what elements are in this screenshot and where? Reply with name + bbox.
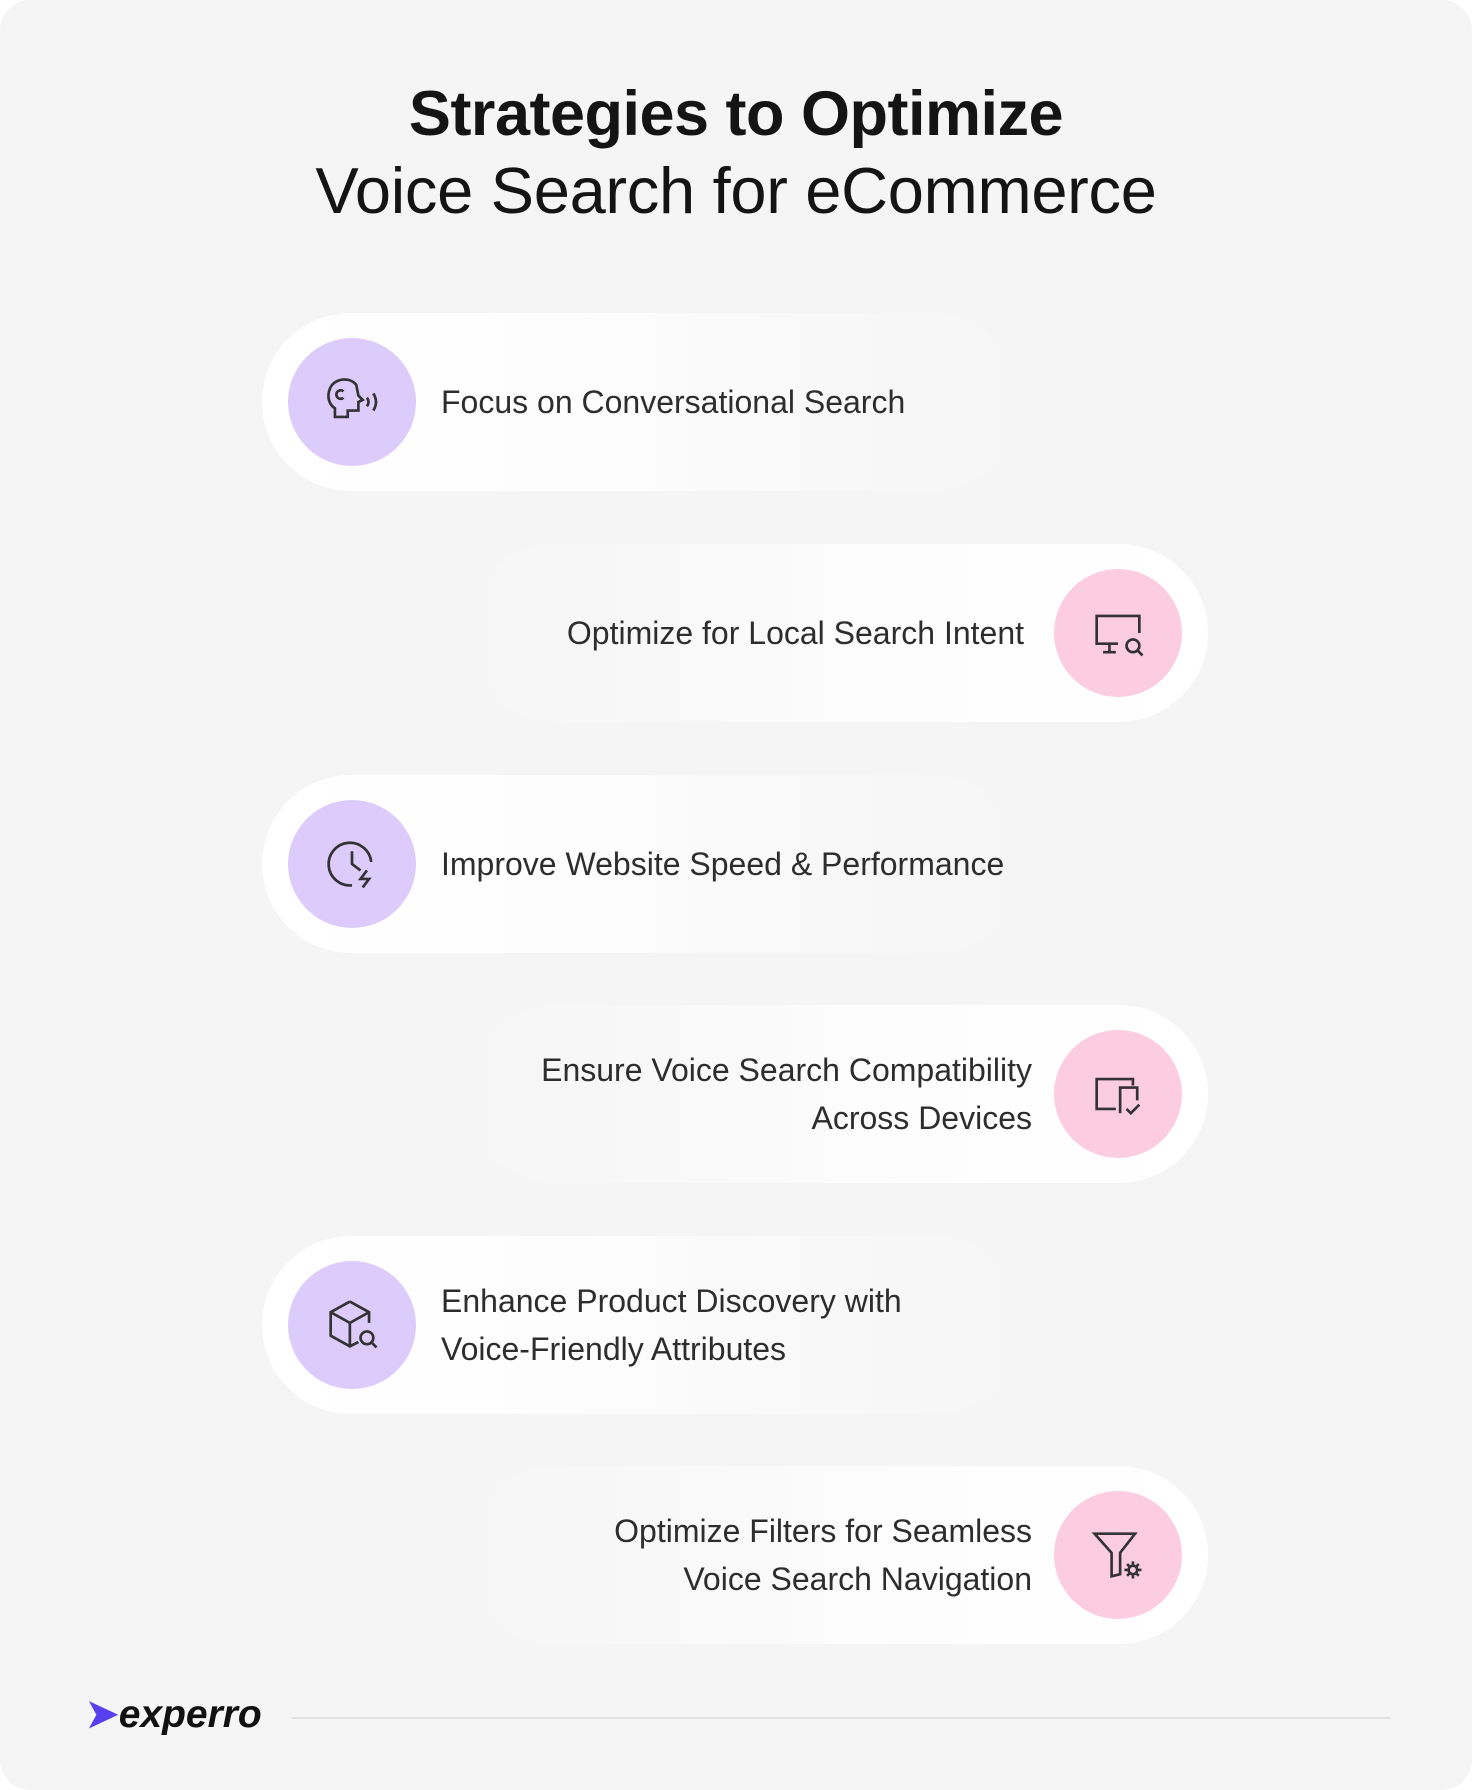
text: Optimize Filters for Seamless <box>614 1513 1032 1549</box>
panel: device compatibility <box>466 1005 1208 1183</box>
icon: devices check <box>1054 1030 1182 1158</box>
title: Strategies to Optimize <box>409 79 1063 149</box>
icon: monitor search <box>1054 569 1182 697</box>
text: Ensure Voice Search Compatibility <box>541 1052 1032 1088</box>
panel: website speed <box>262 775 1022 953</box>
panel: local search <box>466 544 1208 722</box>
text: Focus on Conversational Search <box>441 384 905 420</box>
text <box>541 1052 1032 1136</box>
panel: filters <box>466 1466 1208 1644</box>
text: Voice-Friendly Attributes <box>441 1331 786 1367</box>
text: Across Devices <box>812 1100 1032 1136</box>
logo: ➤experro <box>86 1693 262 1736</box>
icon: clock lightning <box>288 800 416 928</box>
text <box>614 1513 1032 1597</box>
text: Voice Search Navigation <box>683 1561 1032 1597</box>
panel: conversational search <box>262 313 1022 491</box>
title: Voice Search for eCommerce <box>315 154 1157 227</box>
icon: speaking head <box>288 338 416 466</box>
panel: product discovery <box>262 1236 1022 1414</box>
text: Enhance Product Discovery with <box>441 1283 902 1319</box>
icon: box search <box>288 1261 416 1389</box>
text <box>441 1283 902 1367</box>
icon: filter gear <box>1054 1491 1182 1619</box>
text: Optimize for Local Search Intent <box>567 615 1024 651</box>
title <box>315 79 1157 227</box>
text: Improve Website Speed & Performance <box>441 846 1004 882</box>
